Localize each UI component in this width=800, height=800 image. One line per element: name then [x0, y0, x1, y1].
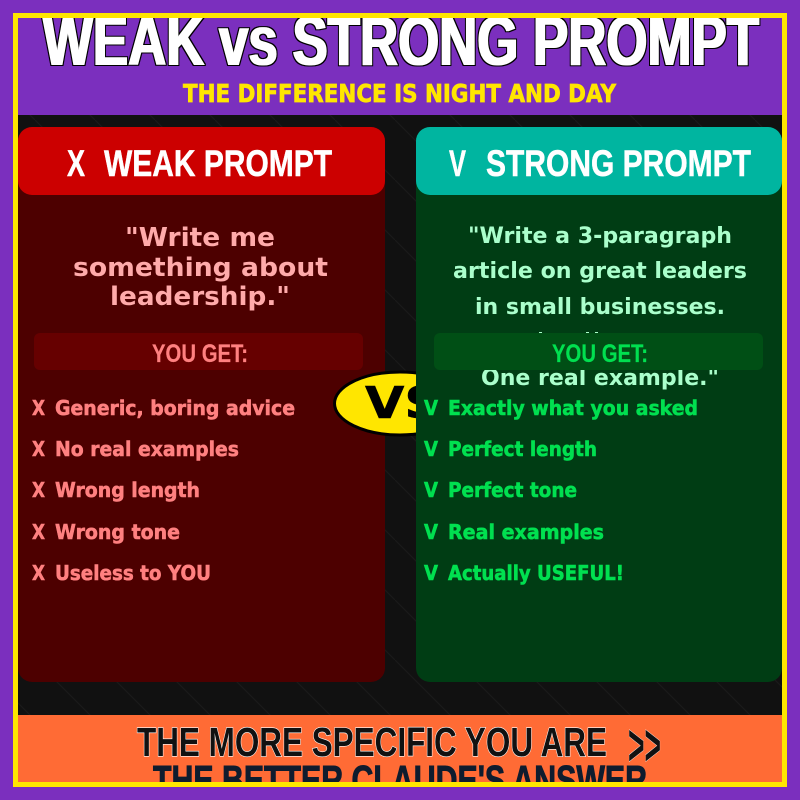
strong results list: Actually USEFUL! — [448, 561, 624, 585]
strong prompt quote: in small businesses. — [475, 295, 725, 320]
VS badge — [334, 372, 466, 435]
strong results list: V — [424, 396, 438, 420]
strong results list: Real examples — [448, 520, 604, 544]
strong results list: V — [424, 437, 438, 461]
subtitle: THE DIFFERENCE IS NIGHT AND DAY — [183, 79, 616, 108]
strong you get bar: YOU GET: — [552, 340, 648, 368]
header band — [18, 2, 782, 115]
strong results list: Exactly what you asked — [448, 396, 698, 420]
strong panel heading — [416, 127, 782, 195]
strong prompt quote — [453, 224, 747, 391]
weak results list: No real examples — [55, 437, 239, 461]
strong results list: V — [424, 561, 438, 585]
weak results list: Wrong tone — [55, 520, 180, 544]
footer banner: >> — [628, 713, 661, 778]
panel: strong prompt — [416, 127, 782, 682]
weak results list: X — [32, 520, 45, 544]
strong panel heading: V — [449, 143, 466, 184]
strong results list — [424, 396, 698, 585]
weak prompt quote: "Write me — [125, 223, 275, 253]
weak results list: X — [32, 561, 45, 585]
weak results list: Generic, boring advice — [55, 396, 295, 420]
strong panel body — [416, 127, 782, 682]
VS badge: VS — [365, 378, 441, 429]
panel: weak prompt — [18, 127, 385, 682]
cover below frame — [0, 787, 800, 800]
weak results list: Wrong length — [55, 478, 200, 502]
dark background area — [18, 115, 782, 715]
footer line one: THE MORE SPECIFIC YOU ARE — [137, 719, 607, 765]
weak panel heading: WEAK PROMPT — [104, 143, 332, 184]
strong results list: Perfect length — [448, 437, 597, 461]
strong results list: V — [424, 478, 438, 502]
weak results list: X — [32, 437, 45, 461]
weak results list: X — [32, 478, 45, 502]
weak results list: X — [32, 396, 45, 420]
strong prompt quote: "Write a 3-paragraph — [468, 224, 732, 249]
weak you get bar — [34, 333, 363, 370]
weak prompt quote: something about — [73, 253, 328, 283]
cover above frame — [0, 0, 800, 13]
strong results list: Perfect tone — [448, 478, 577, 502]
weak results list: Useless to YOU — [55, 561, 211, 585]
weak prompt quote — [73, 223, 328, 312]
weak panel body — [18, 127, 385, 682]
weak panel heading: X — [67, 143, 85, 184]
strong prompt quote: One real example." — [481, 366, 719, 391]
strong prompt quote: article on great leaders — [453, 259, 747, 284]
weak panel heading — [18, 127, 385, 195]
weak results list — [32, 396, 295, 585]
strong results list: V — [424, 520, 438, 544]
footer banner — [18, 713, 782, 800]
weak you get bar: YOU GET: — [152, 340, 248, 368]
weak prompt quote: leadership." — [110, 282, 290, 312]
strong you get bar — [434, 333, 763, 370]
